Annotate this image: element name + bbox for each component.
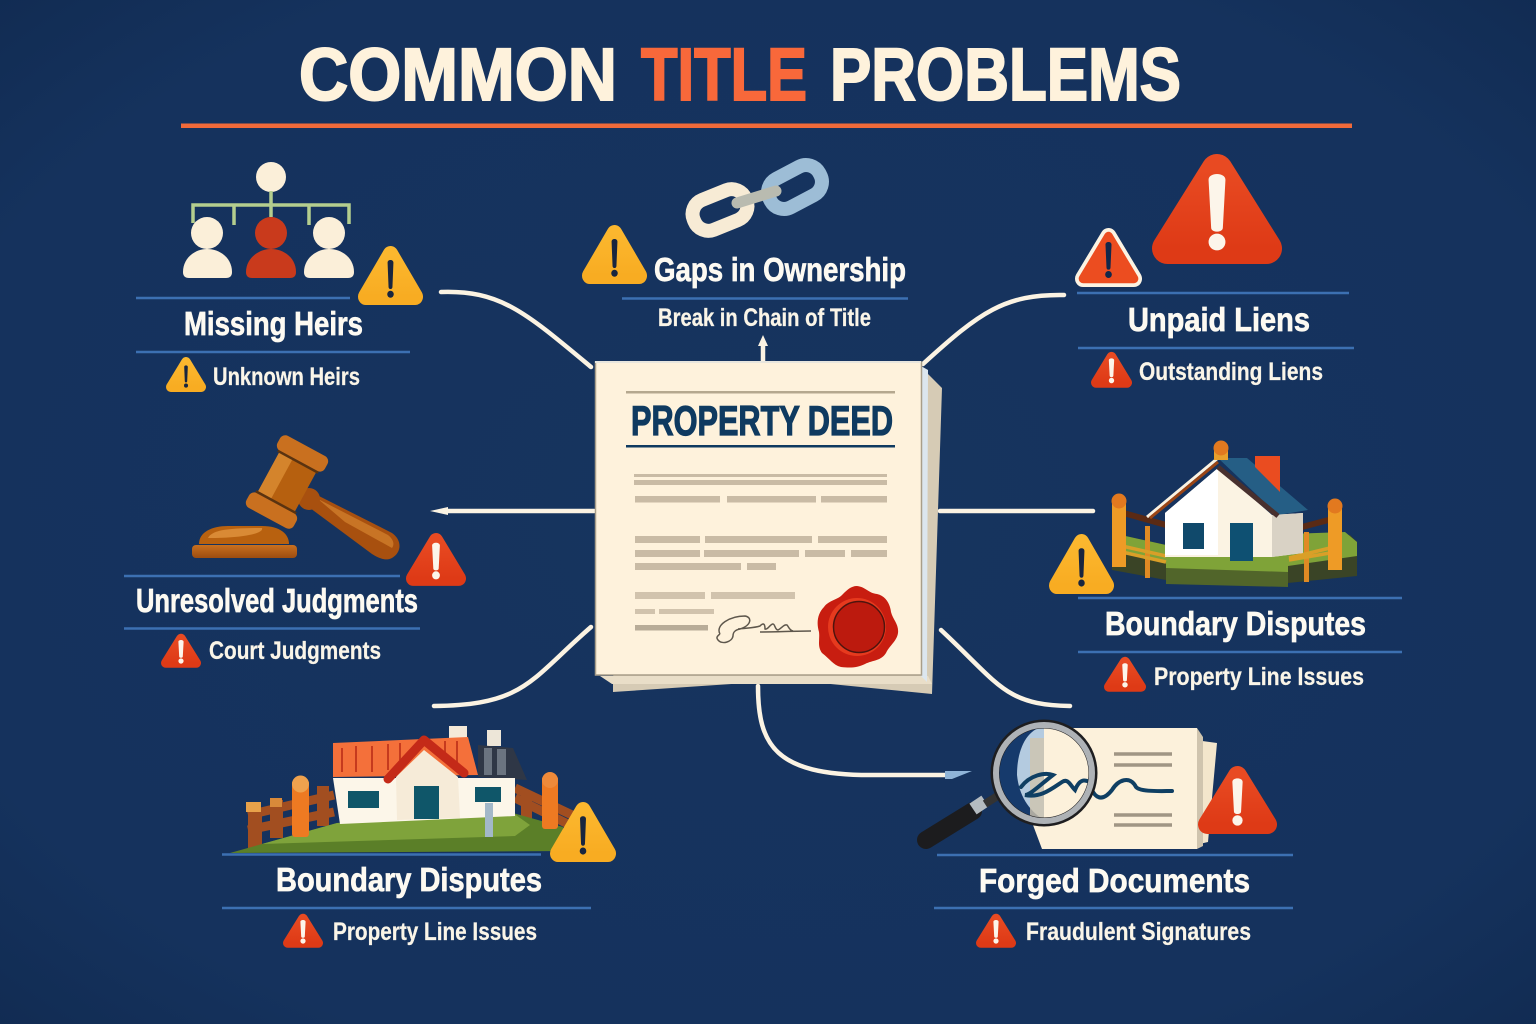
deed heading: PROPERTY DEED — [631, 397, 893, 444]
sublabel: Court Judgments — [209, 637, 381, 665]
sublabel: Unknown Heirs — [213, 363, 360, 391]
connector arrows — [430, 292, 1093, 779]
icon: house with fence — [1112, 440, 1357, 587]
icon: warning — [590, 233, 639, 277]
back sheets — [613, 372, 942, 694]
icon: gavel — [192, 433, 400, 559]
icon: house with fence — [230, 726, 572, 853]
panel: unpaid liens — [1077, 170, 1354, 386]
sublabel: Break in Chain of Title — [658, 304, 871, 332]
panel: forged documents — [926, 724, 1293, 946]
signature — [717, 616, 811, 643]
heading: Gaps in Ownership — [654, 252, 906, 289]
main sheet — [596, 362, 922, 675]
icon: small warning — [981, 919, 1011, 944]
icon: large warning — [1168, 170, 1266, 250]
panel: document — [595, 362, 942, 694]
heading: Unpaid Liens — [1128, 302, 1310, 339]
icon: chain links — [688, 160, 827, 235]
icon: warning — [413, 541, 459, 579]
icon: small warning — [1096, 357, 1127, 383]
sublabel: Fraudulent Signatures — [1026, 918, 1251, 946]
title: TITLE — [641, 33, 807, 116]
title: PROBLEMS — [830, 33, 1181, 116]
wax seal — [818, 586, 898, 668]
icon: warning — [1057, 542, 1106, 587]
panel: unresolved judgments — [124, 433, 459, 665]
heading: Forged Documents — [979, 863, 1250, 900]
icon: small warning — [166, 639, 196, 664]
heading: Boundary Disputes — [1105, 606, 1366, 643]
sublabel: Property Line Issues — [333, 918, 537, 946]
heading: Missing Heirs — [184, 306, 363, 343]
panel: gaps in ownership — [590, 160, 908, 332]
title underline — [181, 124, 1352, 128]
sublabel: Outstanding Liens — [1139, 358, 1323, 386]
panel: missing heirs — [136, 162, 415, 391]
panel: boundary disputes right — [1057, 440, 1402, 691]
icon: warning — [1207, 776, 1268, 826]
icon: outlined warning — [1083, 236, 1134, 279]
icon: small warning — [1109, 662, 1141, 687]
icon: small warning — [171, 362, 201, 388]
icon: warning — [558, 810, 608, 855]
heading: Unresolved Judgments — [136, 583, 418, 620]
title — [299, 33, 1181, 116]
title: COMMON — [299, 33, 617, 116]
icon: warning — [366, 254, 415, 298]
heading: Boundary Disputes — [276, 862, 542, 899]
sublabel: Property Line Issues — [1154, 663, 1364, 691]
icon: small warning — [288, 919, 318, 944]
icon: forged document with magnifier — [926, 724, 1217, 849]
panel: boundary disputes left — [222, 726, 608, 946]
document text lines — [634, 474, 887, 630]
icon: family tree — [183, 162, 354, 278]
